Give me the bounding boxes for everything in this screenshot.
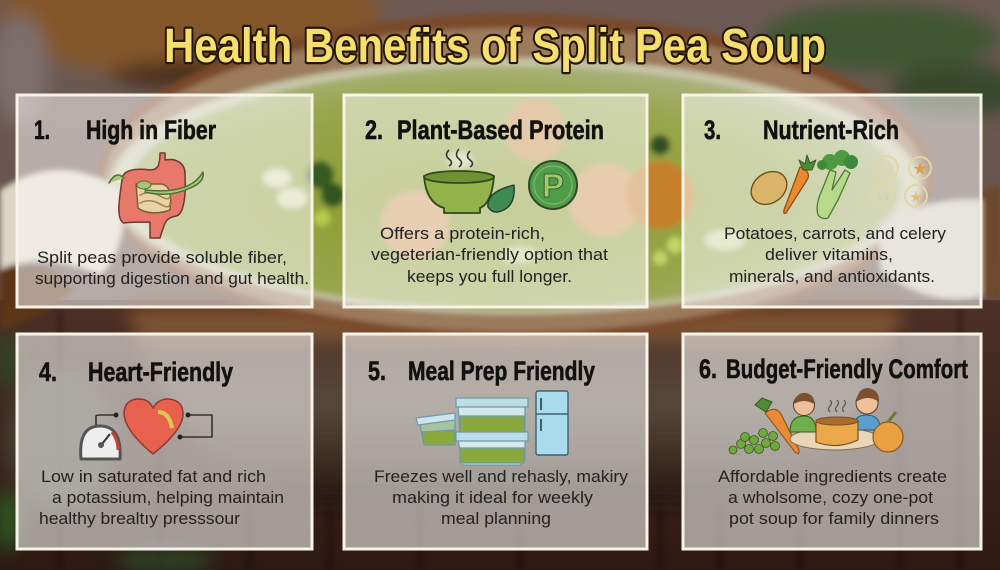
text: nutrient description: deliver vitamins,: [765, 246, 893, 264]
panel: 2 Plant-Based Protein: [344, 95, 647, 307]
icon: protein P badge: P: [542, 167, 564, 204]
panel: 4 Heart-Friendly: [17, 334, 312, 549]
icon: four vitamin badges: ★: [913, 159, 927, 178]
heading: High in Fiber: [34, 115, 216, 145]
text: nutrient description: [724, 225, 947, 286]
heading: Meal Prep Friendly: 5.: [368, 356, 386, 386]
text: heart description: Low in saturated fat and rich: [41, 468, 266, 486]
icon: four vitamin badges: ★: [909, 188, 923, 206]
title: Health Benefits of Split Pea Soup: [164, 20, 826, 73]
text: budget description: Affordable ingredients create: [718, 468, 947, 486]
text: meal prep description: [374, 468, 629, 528]
panel: 6 Budget-Friendly Comfort: [683, 334, 981, 549]
heading: High in Fiber: 1.: [34, 115, 50, 145]
icon: heart with blood pressure gauge: [81, 399, 212, 459]
text: protein description: keeps you full longer.: [407, 268, 572, 286]
icon: family with soup pot and vegetables: [729, 388, 903, 454]
icon: potato, carrot, celery: [745, 150, 858, 219]
text: heart description: a potassium, helping maintain: [52, 489, 284, 507]
text: protein description: [371, 225, 608, 286]
text: protein description: vegeterian-friendly option that: [371, 246, 608, 264]
heading: Meal Prep Friendly: Meal Prep Friendly: [408, 356, 595, 386]
text: nutrient description: Potatoes, carrots, and celery: [724, 225, 947, 243]
text: fiber description: supporting digestion and gut health.: [35, 270, 309, 288]
icon: protein P badge: [529, 161, 577, 209]
panel: 1 High in Fiber: [17, 95, 312, 307]
panel: 3 Nutrient-Rich: [683, 95, 981, 307]
text: fiber description: Split peas provide soluble fiber,: [37, 249, 287, 267]
heading: Budget-Friendly Comfort: 6.: [699, 354, 717, 384]
text: meal prep description: making it ideal for weekly: [392, 489, 594, 507]
text: meal prep description: meal planning: [441, 510, 551, 528]
heading: Nutrient-Rich: Nutrient-Rich: [763, 115, 899, 145]
text: budget description: [718, 468, 947, 528]
text: heart description: healthy brealtıy presssour: [39, 510, 241, 528]
icon: four vitamin badges: [871, 156, 931, 208]
heading: Nutrient-Rich: [704, 115, 899, 145]
icon: soup bowl with steam and leaf: [424, 149, 514, 213]
text: budget description: pot soup for family dinners: [729, 510, 939, 528]
heading: Plant-Based Protein: 2.: [365, 115, 383, 145]
heading: Heart-Friendly: Heart-Friendly: [88, 357, 233, 387]
text: nutrient description: minerals, and antioxidants.: [729, 268, 935, 286]
text: fiber description: [35, 249, 309, 288]
icon: refrigerator: [536, 391, 568, 455]
text: budget description: a wholsome, cozy one-pot: [728, 489, 933, 507]
icon: intestines: [109, 153, 203, 238]
panel: 5 Meal Prep Friendly: [344, 334, 647, 549]
icon: stacked meal prep containers: [416, 398, 528, 465]
heading: Meal Prep Friendly: [368, 356, 595, 386]
heading: Heart-Friendly: [39, 357, 233, 387]
heading: Heart-Friendly: 4.: [39, 357, 57, 387]
icon: four vitamin badges: Vit: [877, 192, 889, 203]
text: protein description: Offers a protein-rich,: [380, 225, 545, 243]
text: meal prep description: Freezes well and rehasly, makiry: [374, 468, 629, 486]
text: heart description: [39, 468, 284, 528]
heading: Plant-Based Protein: Plant-Based Protein: [397, 115, 604, 145]
heading: Nutrient-Rich: 3.: [704, 115, 721, 145]
heading: High in Fiber: High in Fiber: [86, 115, 216, 145]
